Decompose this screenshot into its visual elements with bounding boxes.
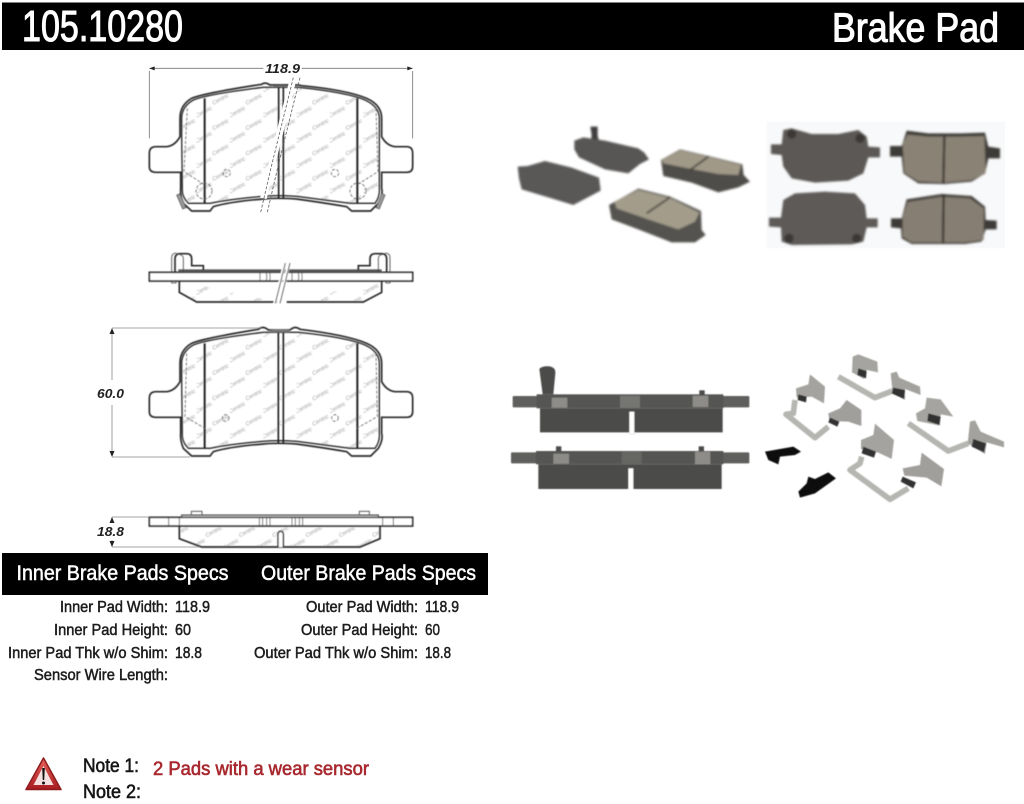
photo: pads in perspective xyxy=(518,127,750,242)
clip left xyxy=(786,374,861,438)
lower pad side xyxy=(511,446,749,491)
inner pad specs: Inner Pad Height: xyxy=(54,622,168,639)
outer pad specs: 18.8 xyxy=(425,645,451,662)
inner pad specs: 118.9 xyxy=(175,599,210,616)
backing-plate pad top xyxy=(574,137,649,173)
black clip upper xyxy=(765,447,801,464)
product type: Brake Pad xyxy=(832,4,999,50)
backing plate upper xyxy=(771,128,880,183)
specs table header xyxy=(2,553,488,595)
inner specs heading: Inner Brake Pads Specs xyxy=(16,562,228,585)
notes: Note 1: xyxy=(83,756,139,777)
black clip lower xyxy=(798,472,836,498)
friction pad right xyxy=(661,149,750,192)
technical drawing: pad rear view with height dimension xyxy=(149,327,413,456)
friction pad lower xyxy=(891,194,997,244)
note 2 label: Note 2: xyxy=(83,782,141,803)
inner pad specs: 60 xyxy=(175,622,191,639)
photo: hardware kit xyxy=(765,354,1004,499)
clip bottom xyxy=(850,424,944,499)
width dimension 118.9 xyxy=(149,61,413,138)
upper pad side xyxy=(513,390,749,434)
notes xyxy=(83,756,370,803)
technical drawing: pad lower side view xyxy=(149,511,413,547)
technical drawing: pad front view with width dimension xyxy=(149,61,413,212)
height dimension 60.0: 60.0 xyxy=(97,386,125,401)
header bar xyxy=(2,2,1024,51)
wear sensor xyxy=(590,127,599,141)
inner pad specs: 18.8 xyxy=(175,645,202,662)
wear sensor clip xyxy=(539,366,555,394)
backing-plate pad left xyxy=(518,161,601,205)
inner pad specs: Sensor Wire Length: xyxy=(34,667,168,684)
outer pad specs: 60 xyxy=(425,622,440,639)
height dimension 60.0 xyxy=(97,328,262,457)
outer pad specs xyxy=(254,599,459,662)
inner pad specs: Inner Pad Thk w/o Shim: xyxy=(8,645,168,662)
inner pad specs: Inner Pad Width: xyxy=(60,599,168,616)
clip right xyxy=(908,398,1004,454)
outer specs heading: Outer Brake Pads Specs xyxy=(261,562,476,585)
width dimension 118.9: 118.9 xyxy=(265,61,301,76)
friction pad lower xyxy=(609,189,706,242)
photo: pads side view xyxy=(511,366,749,491)
thickness dimension 18.8: 18.8 xyxy=(97,524,125,539)
photo: pads flat xyxy=(767,122,1005,248)
friction pad upper xyxy=(890,131,1000,184)
pad outline xyxy=(149,327,413,456)
thickness dimension 18.8 xyxy=(97,517,200,547)
outer pad specs: 118.9 xyxy=(425,599,459,616)
technical drawing: pad side view with clips xyxy=(149,253,413,303)
clip top xyxy=(838,354,921,400)
outer pad specs: Outer Pad Height: xyxy=(301,622,418,639)
outer pad specs: Outer Pad Width: xyxy=(306,599,418,616)
break lines xyxy=(261,78,300,212)
pad outline xyxy=(149,83,413,211)
part number: 105.10280 xyxy=(22,2,183,51)
outer pad specs: Outer Pad Thk w/o Shim: xyxy=(254,645,418,662)
inner pad specs xyxy=(8,599,210,684)
note 1 text: 2 Pads with a wear sensor xyxy=(153,759,370,780)
icon: warning triangle xyxy=(26,758,61,790)
backing plate lower xyxy=(769,192,878,245)
